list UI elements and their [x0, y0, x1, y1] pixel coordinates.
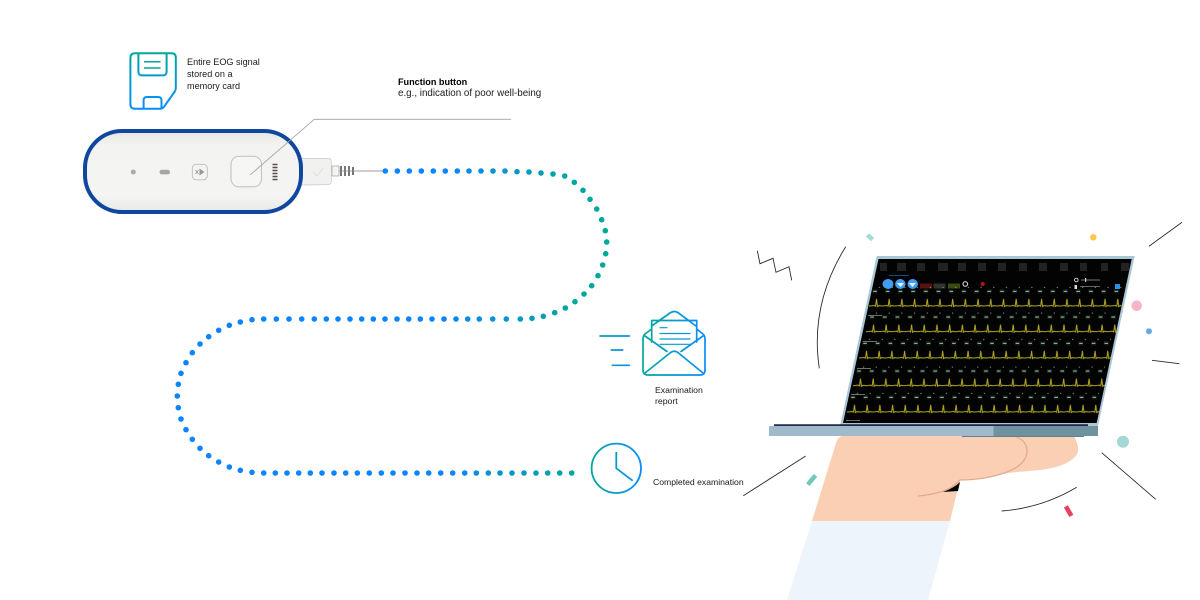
text: memory card caption: Entire EOG signal	[187, 57, 260, 67]
toolbar icons	[880, 263, 1129, 271]
decorative motion lines	[743, 222, 1182, 511]
yellow dot	[1090, 234, 1097, 240]
sleeve	[787, 521, 950, 600]
text: memory card caption: stored on a	[187, 69, 233, 79]
trace 2	[866, 312, 1117, 335]
envelope	[643, 312, 705, 375]
device with cable	[85, 119, 511, 212]
lower arc	[1002, 487, 1077, 511]
logo mark	[192, 164, 207, 180]
battery indicator	[160, 170, 170, 174]
trace 1	[869, 286, 1122, 309]
filter buttons	[920, 284, 960, 288]
shadow wedge	[943, 482, 960, 492]
text: completed examination: Completed examination	[653, 477, 744, 487]
connector	[301, 158, 357, 185]
left arc	[817, 247, 846, 368]
mode buttons	[883, 279, 918, 289]
lower left ray	[743, 456, 806, 496]
speed lines	[600, 336, 629, 365]
leader line	[250, 119, 511, 175]
indicator light	[131, 170, 136, 174]
text: function button caption: Function button	[398, 77, 467, 87]
record indicator	[981, 282, 985, 286]
screen	[843, 259, 1132, 423]
settings gear	[963, 282, 968, 286]
trace 4	[853, 366, 1105, 389]
hand	[812, 436, 1078, 521]
device body	[85, 131, 301, 212]
trace 5	[847, 392, 1099, 415]
pink dot	[1131, 300, 1142, 311]
trace 3	[859, 338, 1111, 361]
zigzag	[757, 251, 792, 280]
level ticks	[272, 164, 278, 180]
decorative confetti	[806, 233, 1152, 517]
zoom sliders	[1074, 278, 1100, 289]
screen frame	[840, 256, 1135, 426]
blue dot	[1146, 328, 1152, 334]
icon: memory card	[130, 53, 176, 109]
lower right ray	[1102, 453, 1156, 499]
hand holding laptop	[787, 436, 1078, 600]
teal tick bottom	[806, 474, 817, 486]
laptop	[769, 256, 1135, 437]
icon: examination report envelope	[600, 312, 705, 375]
letter	[652, 320, 697, 342]
text: examination report: report	[655, 396, 678, 406]
trace labels	[846, 315, 882, 421]
text: function button caption: e.g., indication of poor well-being	[398, 88, 541, 99]
thumb crease	[918, 436, 1027, 496]
teal dot	[1117, 436, 1129, 448]
ECG traces	[847, 286, 1122, 415]
red tick	[1064, 505, 1073, 517]
dotted signal path	[174, 168, 610, 476]
teal tick top	[866, 233, 874, 241]
laptop hinge	[774, 424, 1088, 426]
software toolbar	[880, 263, 1129, 289]
text: examination report: Examination	[655, 385, 703, 395]
icon: clock	[592, 444, 641, 493]
upper right ray	[1149, 222, 1182, 246]
function button	[231, 156, 262, 187]
right ray	[1152, 360, 1179, 364]
text: memory card caption: memory card	[187, 81, 240, 91]
laptop base	[769, 426, 1098, 437]
blue selector	[1115, 284, 1120, 289]
cable	[357, 170, 386, 172]
